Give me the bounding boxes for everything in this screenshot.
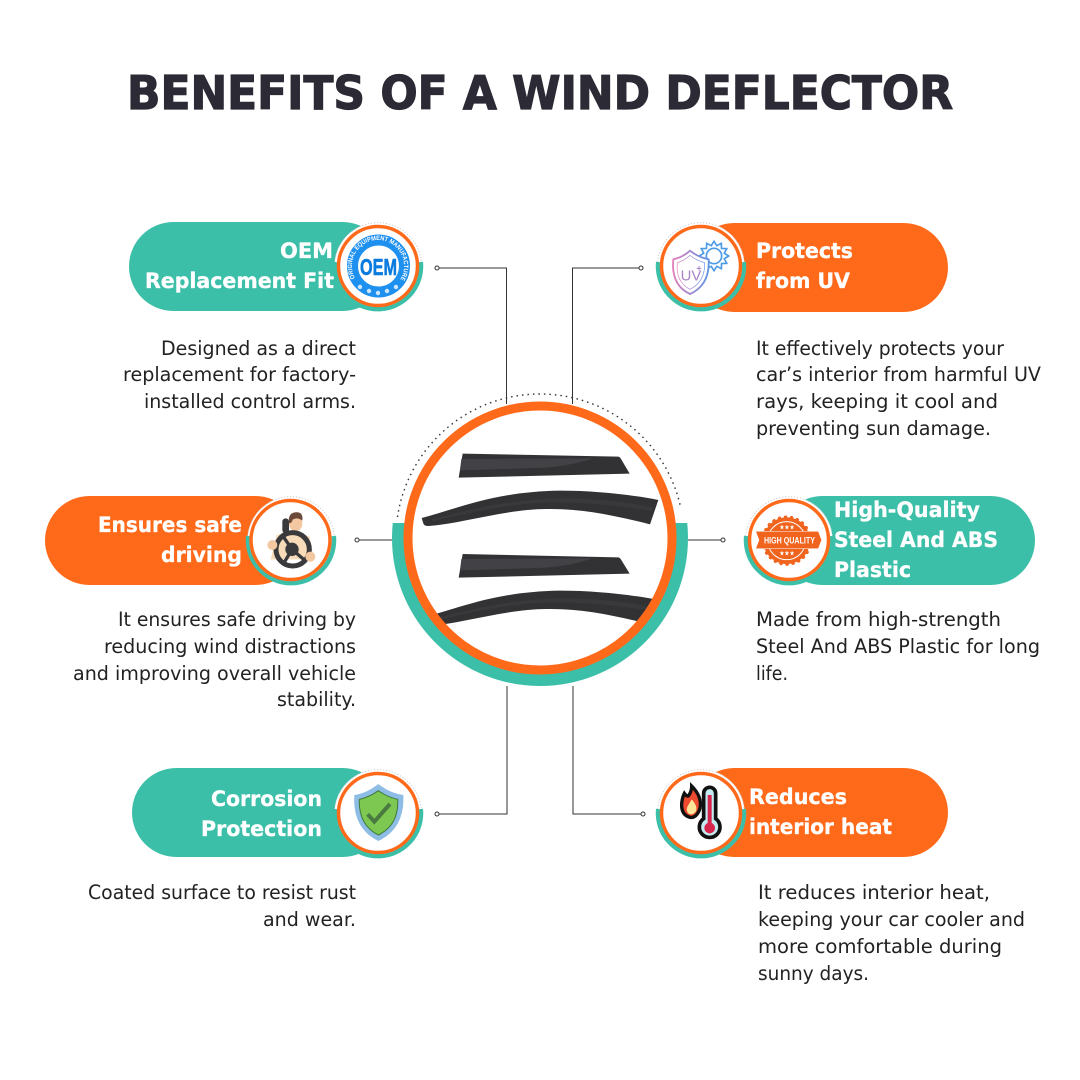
label [756,239,853,294]
label: Steel And ABS [834,528,998,553]
label [201,787,322,842]
orange ring [251,500,330,580]
label: Corrosion [211,787,322,812]
icon: UV shield and sun [673,241,729,294]
description: High-Quality Steel And ABS Plastic: life. [756,662,788,685]
icon: UV shield and sun: UV [681,269,702,285]
white disc [334,222,422,310]
pill [132,768,387,857]
description: Protects from UV: preventing sun damage. [756,417,991,440]
dotted arc [248,497,334,536]
description: Reduces interior heat: sunny days. [758,962,869,985]
description: Ensures safe driving: reducing wind distractions [104,635,356,658]
teal arc [746,536,832,583]
pill [690,768,948,857]
connector lines [355,266,725,816]
dotted arc [335,770,421,809]
white disc [248,496,334,584]
pill [129,222,387,311]
white disc [408,406,672,670]
description: Protects from UV: It effectively protects your [756,337,1005,360]
white disc [334,770,422,856]
description: Protects from UV: rays, keeping it cool and [756,390,998,413]
icon: flame and thermometer [682,786,720,837]
icon: high quality seal: ★★★ [779,523,795,531]
badge: Corrosion Protection [132,768,422,857]
label: High-Quality [834,498,980,523]
label: Protects [756,239,853,264]
orange ring [408,406,672,670]
badge: OEM Replacement Fit [129,222,424,312]
description: Reduces interior heat: It reduces interior heat, [758,881,990,904]
teal half ring [392,523,688,686]
badge: Reduces interior heat [658,768,948,857]
badge: High-Quality Steel And ABS Plastic [746,496,1035,585]
teal arc [335,809,421,856]
description: Ensures safe driving: It ensures safe driving by [118,608,356,631]
orange ring [750,500,828,580]
icon: high quality seal [756,517,822,564]
orange ring [338,774,418,852]
pill [778,496,1035,585]
pill [690,223,948,312]
dotted arc [335,223,421,262]
description: Protects from UV: car’s interior from harmful UV [756,363,1042,386]
central product circle [398,394,682,680]
description: Ensures safe driving: stability. [277,688,356,711]
label [98,513,242,568]
orange ring [338,226,418,306]
icon: OEM seal [347,234,410,298]
label [145,239,334,294]
description: OEM Replacement Fit: replacement for factory- [123,363,356,386]
label: Ensures safe [98,513,242,538]
label: driving [161,543,242,568]
description: Reduces interior heat: more comfortable during [758,935,1002,958]
teal arc [658,809,744,856]
icon: OEM seal: ORIGINAL EQUIPMENT MANUFACTURER [348,236,408,282]
description: Reduces interior heat [758,881,1025,985]
orange ring [662,226,740,306]
icon: high quality seal: HIGH QUALITY [764,536,815,546]
dotted arc [658,770,744,809]
dotted arc [746,497,832,536]
description: Reduces interior heat: keeping your car cooler and [758,908,1025,931]
label: Plastic [834,558,911,583]
description: High-Quality Steel And ABS Plastic [756,608,1040,685]
wind deflector product [422,454,658,626]
dotted arc [398,394,681,517]
label: Reduces [749,785,847,810]
label [749,785,892,840]
description: OEM Replacement Fit [123,337,356,413]
description: Ensures safe driving: and improving overall vehicle [73,662,356,685]
description: High-Quality Steel And ABS Plastic: Steel And ABS Plastic for long [756,635,1040,658]
pill [45,496,300,585]
description: High-Quality Steel And ABS Plastic: Made from high-strength [756,608,1001,631]
description: Ensures safe driving [73,608,356,711]
dotted arc [658,223,744,262]
label: Protection [201,817,322,842]
description: OEM Replacement Fit: installed control arms. [144,390,356,413]
white disc [658,222,744,310]
badge: Protects from UV [658,222,948,312]
description: Corrosion Protection [88,881,356,931]
badge: Ensures safe driving [45,496,334,585]
infographic canvas [45,74,1041,984]
label: from UV [756,269,850,294]
description: OEM Replacement Fit: Designed as a direct [161,337,356,360]
icon: green check shield [354,784,403,841]
description: Corrosion Protection: and wear. [263,908,356,931]
teal arc [248,536,334,583]
label: Replacement Fit [145,269,334,294]
label [834,498,998,583]
teal arc [335,262,421,309]
white disc [658,770,744,856]
orange ring [662,774,740,852]
description: Corrosion Protection: Coated surface to resist rust [88,881,356,904]
white disc [746,496,832,584]
title: BENEFITS OF A WIND DEFLECTOR [127,66,953,120]
icon: OEM seal: OEM [360,254,397,280]
label: OEM [280,239,333,264]
description: Protects from UV [756,337,1042,440]
icon: driver at steering wheel [267,512,315,566]
icon: high quality seal: ★★★ [779,550,795,558]
label: interior heat [749,815,892,840]
teal arc [658,262,744,309]
